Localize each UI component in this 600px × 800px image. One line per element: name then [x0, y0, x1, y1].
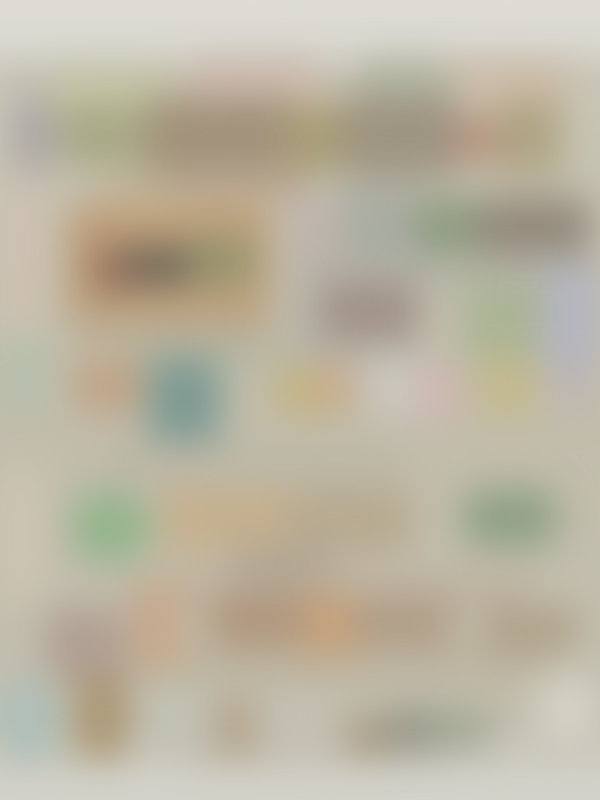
green icon left: [72, 492, 148, 562]
middle row icons: [0, 333, 588, 442]
green icon right: [462, 488, 558, 548]
orange hero panel: [66, 204, 270, 314]
background tints: [0, 172, 590, 760]
lower band: [46, 583, 577, 678]
upper right panels: [286, 188, 600, 373]
lower middle panel: [160, 488, 412, 589]
bottom row: [0, 673, 600, 759]
header band: [16, 60, 572, 192]
